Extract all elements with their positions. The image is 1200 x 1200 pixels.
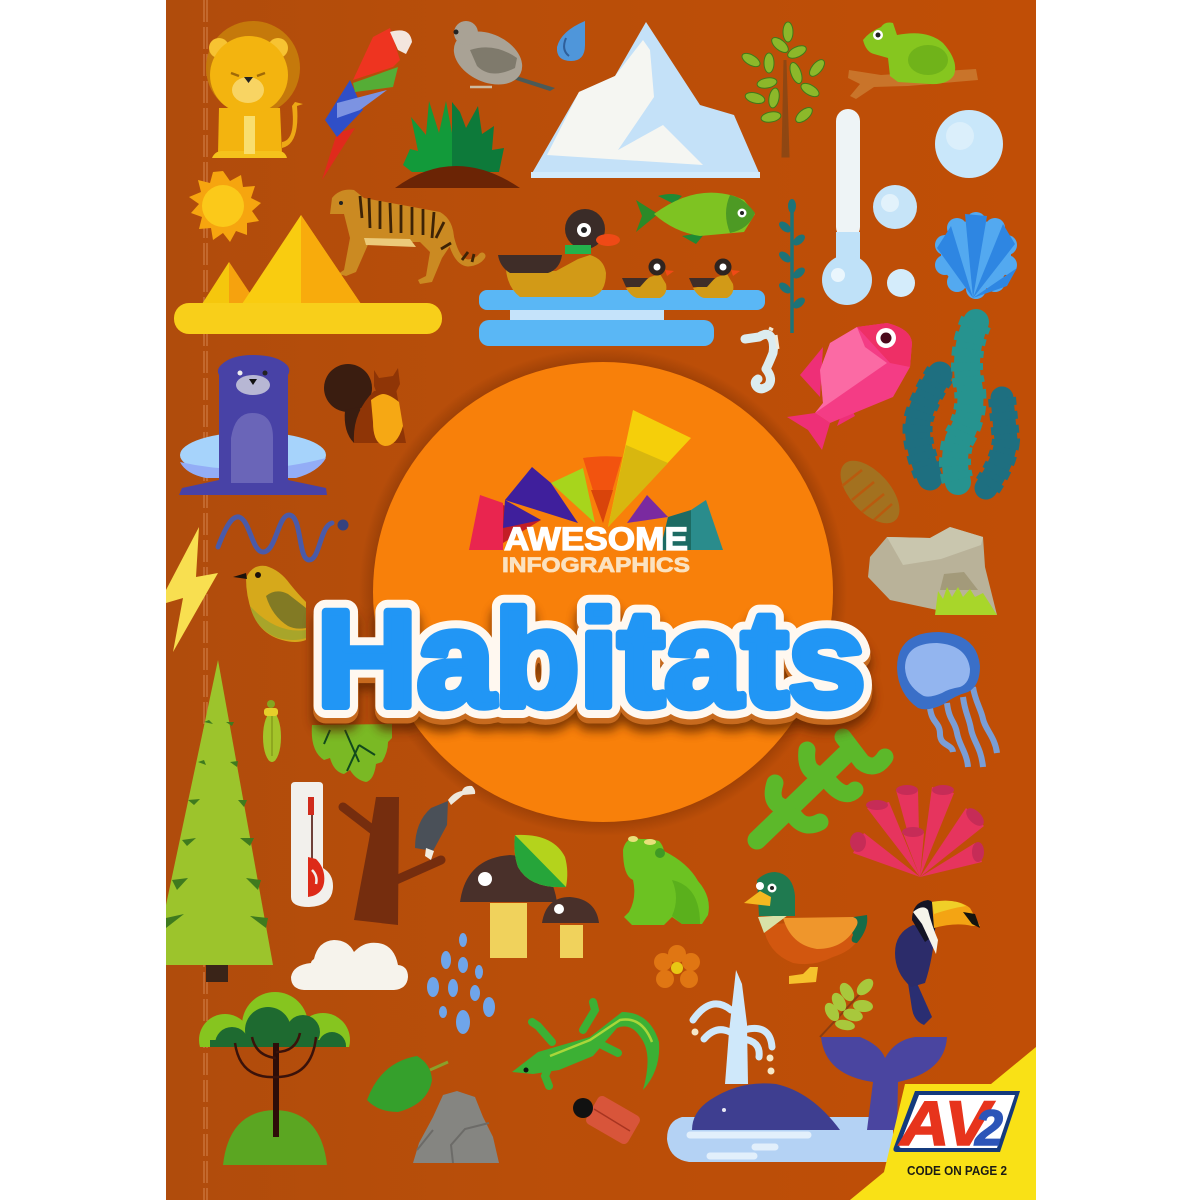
icon: beetle: [263, 700, 281, 762]
icon: mushrooms with leaf: [460, 835, 599, 958]
icon: jellyfish: [897, 632, 997, 767]
icon: leafy sprig: [820, 976, 876, 1037]
icon: sun: [189, 171, 261, 242]
icon: hot thermometer: [291, 782, 333, 907]
series logo: [469, 410, 723, 577]
icon: squirrel: [324, 364, 406, 446]
icon: lion: [206, 21, 303, 158]
icon: rain drops: [427, 933, 495, 1034]
icon: red coral: [850, 785, 987, 877]
icon: grey boulder: [413, 1091, 499, 1163]
icon: lightning bolt: [166, 527, 218, 652]
icon: tiger: [330, 190, 482, 284]
AV2 logo: 2: [974, 1100, 1003, 1156]
icon: thermometer: [822, 109, 872, 305]
icon: seahorse: [745, 328, 778, 389]
icon: iceberg mountain: [531, 22, 760, 178]
icon: pyramids on sand: [174, 215, 442, 334]
icon: rock with grass: [868, 527, 997, 615]
icon: orange flower: [654, 945, 700, 988]
awesome text: AWESOME: [504, 521, 688, 557]
icon: small yellow-green bird: [233, 566, 306, 642]
icon: seaweed cluster: [918, 322, 1006, 488]
icon: green fish: [636, 193, 755, 244]
icon: sea otter on ice: [179, 355, 327, 495]
icon: grass tuft on mound: [395, 101, 520, 188]
icon: red beetle: [573, 1094, 642, 1146]
icon: tropical leaf: [312, 724, 392, 782]
icon: grey dove: [445, 21, 555, 95]
icon: toucan: [895, 900, 980, 1025]
icon: kelp strand: [777, 199, 807, 333]
central orange circle: [359, 348, 847, 836]
code on page 2 caption: CODE ON PAGE 2: [907, 1163, 1007, 1178]
icon: pinecone: [830, 450, 910, 534]
icon: pink fish: [787, 323, 912, 450]
AV2 logo: [893, 1089, 1020, 1159]
icon: whale with spout: [667, 970, 947, 1162]
AV2 logo: AV: [898, 1089, 995, 1159]
icon: acacia tree on hill: [199, 992, 350, 1165]
icon: duck with ducklings on water: [479, 209, 765, 346]
icon: dead tree with vulture: [343, 786, 475, 925]
icon: sapling tree: [740, 22, 827, 156]
logo fan: [469, 410, 723, 550]
icon: green lizard: [512, 1002, 659, 1090]
icon: blue seashell: [935, 212, 1017, 299]
infographics text: INFOGRAPHICS: [502, 554, 690, 577]
title: Habitats: [316, 583, 866, 736]
icon: green leaf: [367, 1056, 448, 1112]
icon: snake: [218, 515, 348, 560]
icon: green frog: [623, 836, 709, 925]
title: Habitats: [316, 583, 866, 736]
icon: cactus: [757, 737, 885, 840]
icon: cloud: [291, 940, 408, 990]
icon: mallard duck: [744, 872, 867, 984]
book cover background: [166, 0, 1036, 1200]
icon: macaw parrot: [322, 28, 412, 180]
title: Habitats: [316, 595, 866, 748]
icon: pine tree: [166, 660, 273, 982]
icon: chameleon on branch: [848, 22, 978, 99]
yellow corner: [850, 1047, 1036, 1200]
icon: bubbles: [873, 110, 1003, 297]
title: Habitats: [316, 588, 866, 741]
icon: water drop: [557, 21, 585, 61]
